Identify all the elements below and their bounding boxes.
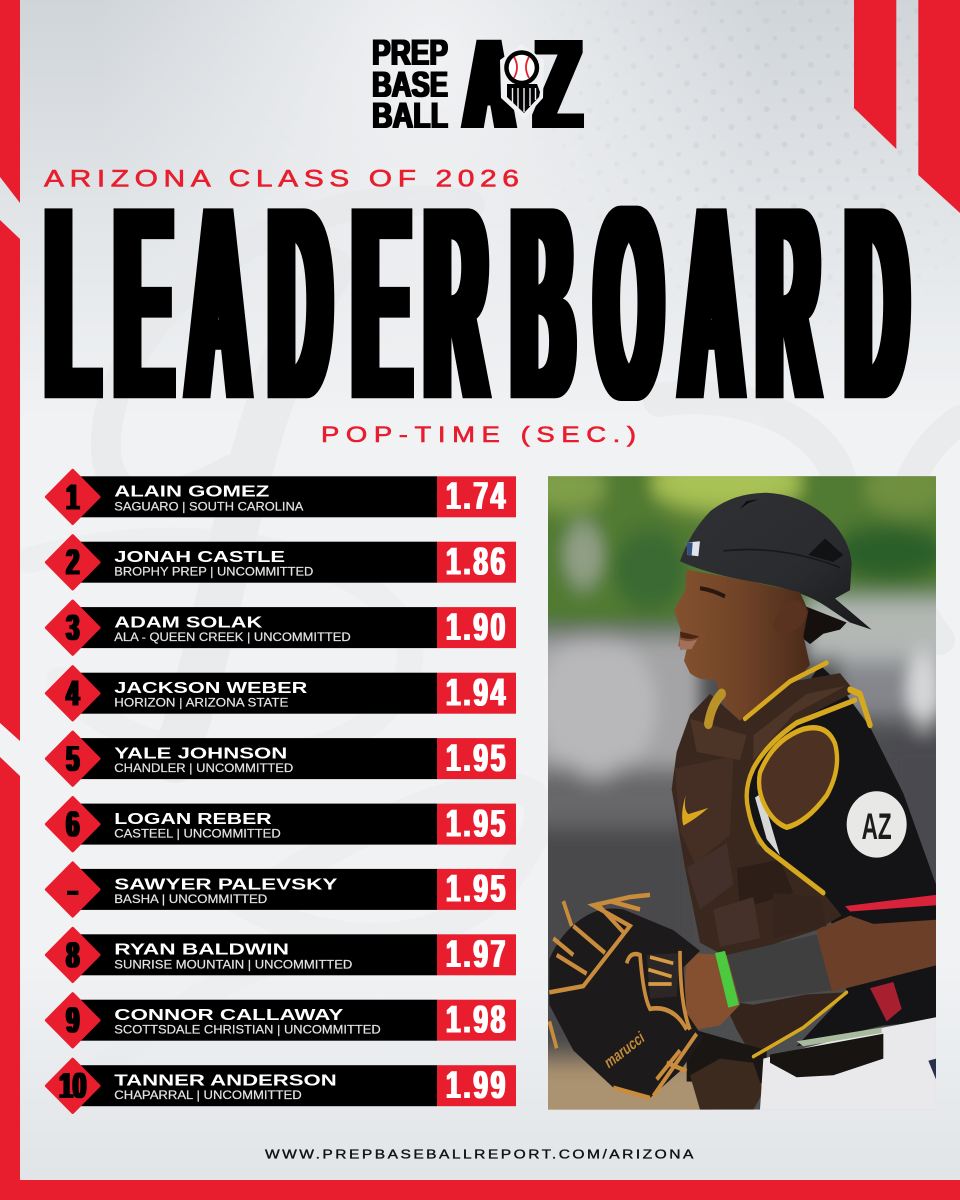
row 9: 1.98 — [446, 998, 508, 1041]
logo wordmark: BASE — [372, 65, 448, 104]
catcher's mitt — [549, 895, 703, 1098]
row 6: 1.95 — [446, 802, 508, 845]
row 5: 5 — [66, 738, 79, 779]
row 10: 1.99 — [446, 1064, 508, 1107]
logo baseball emblem — [500, 44, 544, 119]
row 9: 9 — [66, 1000, 79, 1041]
row 1: ALAIN GOMEZ — [114, 484, 270, 501]
logo wordmark: PREP — [372, 34, 448, 73]
row 1 — [46, 470, 516, 524]
top right red stripes — [854, 0, 960, 213]
row 4: JACKSON WEBER — [114, 680, 308, 697]
row 8: RYAN BALDWIN — [114, 942, 289, 959]
row 4: 4 — [66, 673, 79, 714]
row 7: 1.95 — [446, 868, 508, 911]
logo letters AZ: A — [466, 13, 512, 156]
row 4: HORIZON | ARIZONA STATE — [114, 696, 288, 710]
row 3 — [46, 601, 516, 654]
row 4: 1.94 — [446, 671, 508, 714]
row 2: 1.86 — [446, 540, 508, 583]
logo swoosh on chest — [682, 795, 708, 826]
player arm — [684, 916, 936, 1030]
row 1: 1 — [66, 476, 79, 517]
row 5: YALE JOHNSON — [114, 745, 287, 762]
row 2 — [46, 536, 516, 589]
row 3: 1.90 — [446, 606, 508, 649]
player helmet — [680, 493, 872, 630]
row 5: 1.95 — [446, 737, 508, 780]
row 2: JONAH CASTLE — [114, 549, 285, 566]
player head and neck — [674, 569, 847, 725]
footer website: WWW.PREPBASEBALLREPORT.COM/ARIZONA — [265, 1147, 694, 1162]
subtitle: Arizona Class of 2026: ARIZONA CLASS OF 2026 — [44, 165, 519, 192]
chest protector yellow trim — [708, 663, 870, 1057]
row 4 — [46, 667, 516, 720]
row 8: 1.97 — [446, 933, 508, 976]
row 3: ALA - QUEEN CREEK | UNCOMMITTED — [114, 630, 351, 644]
left red side bar — [0, 0, 20, 1200]
row 10: 10 — [59, 1065, 86, 1106]
category: Pop-Time: POP-TIME (SEC.) — [321, 423, 636, 447]
sleeve patch — [847, 791, 907, 858]
row 9: SCOTTSDALE CHRISTIAN | UNCOMMITTED — [114, 1023, 381, 1037]
row 7: - — [67, 869, 78, 910]
wrist wrap and wristband — [715, 934, 832, 1008]
player belt and pants — [760, 1017, 936, 1110]
row 7 — [46, 863, 516, 916]
row 6: CASTEEL | UNCOMMITTED — [114, 827, 281, 841]
player jersey — [747, 665, 936, 1046]
logo wordmark — [372, 34, 448, 136]
bottom red bar — [0, 1180, 960, 1200]
shoulder pad — [759, 728, 837, 827]
row 3: 3 — [66, 607, 79, 648]
logo letters AZ: Z — [537, 13, 579, 156]
title: Leaderboard: LEADERBOARD — [47, 150, 907, 458]
row 1: SAGUARO | SOUTH CAROLINA — [114, 499, 303, 513]
row 8: 8 — [66, 934, 79, 975]
row 6: 6 — [66, 804, 79, 845]
row 9 — [46, 994, 516, 1047]
logo wordmark: BALL — [372, 97, 448, 136]
row 6 — [46, 798, 516, 851]
row 6: LOGAN REBER — [114, 811, 272, 828]
row 10: CHAPARRAL | UNCOMMITTED — [114, 1088, 302, 1102]
logo: Prep Baseball AZ — [372, 13, 579, 156]
row 5 — [46, 732, 516, 785]
row 7: BASHA | UNCOMMITTED — [114, 892, 268, 906]
row 8 — [46, 928, 516, 982]
catcher's mitt: marucci — [602, 1028, 647, 1073]
leaderboard list — [46, 470, 516, 1112]
row 5: CHANDLER | UNCOMMITTED — [114, 761, 294, 775]
row 2: 2 — [66, 542, 79, 583]
row 8: SUNRISE MOUNTAIN | UNCOMMITTED — [114, 957, 353, 971]
row 7: SAWYER PALEVSKY — [114, 876, 338, 893]
row 2: BROPHY PREP | UNCOMMITTED — [114, 565, 314, 579]
row 9: CONNOR CALLAWAY — [114, 1007, 344, 1024]
row 10: TANNER ANDERSON — [114, 1073, 337, 1090]
row 10 — [46, 1059, 516, 1112]
row 1: 1.74 — [446, 475, 508, 518]
player photo: catcher — [548, 476, 936, 1110]
row 3: ADAM SOLAK — [114, 614, 263, 631]
photo background — [548, 476, 936, 1110]
sleeve patch: AZ — [862, 806, 892, 848]
player chest protector — [672, 673, 855, 1110]
